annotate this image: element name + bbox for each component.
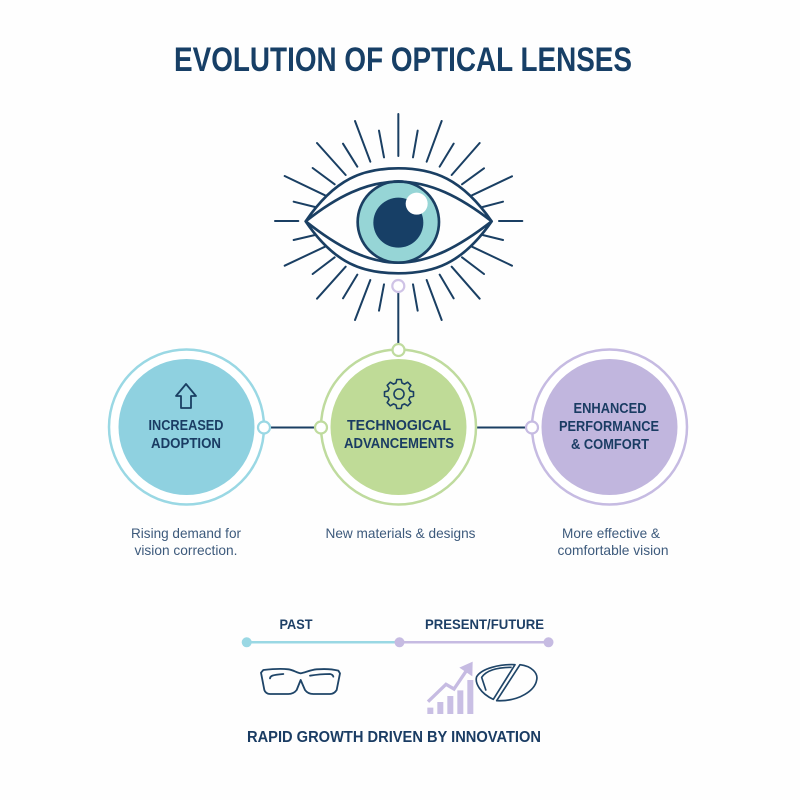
text: new materials: New materials & designs xyxy=(326,525,476,541)
panel: increased adoption xyxy=(109,350,264,504)
text: more effective: More effective & xyxy=(562,525,661,541)
eye rays xyxy=(275,114,522,320)
heading: enhanced performance and comfort: PERFORMANCE xyxy=(559,419,659,435)
connector: eye to center circle xyxy=(397,292,399,345)
panel: technological advancements xyxy=(321,350,476,504)
eye pupil xyxy=(373,198,423,248)
icon: growth chart xyxy=(427,662,473,714)
eye lids xyxy=(306,168,492,273)
connector node: eye xyxy=(392,280,404,292)
eye iris xyxy=(358,181,439,263)
footer caption: RAPID GROWTH DRIVEN BY INNOVATION xyxy=(247,729,541,746)
connector: left to center xyxy=(270,426,315,428)
heading: technological advancements: TECHNOGICAL xyxy=(347,418,451,434)
label: present/future: PRESENT/FUTURE xyxy=(425,616,544,632)
icon: gear xyxy=(384,380,414,408)
heading: technological advancements: ADVANCEMENTS xyxy=(344,436,454,452)
title: EVOLUTION OF OPTICAL LENSES xyxy=(174,41,632,79)
timeline xyxy=(242,637,553,647)
eye highlight xyxy=(406,193,428,215)
label: past: PAST xyxy=(280,616,313,632)
heading: enhanced performance and comfort: ENHANCED xyxy=(574,401,646,417)
node: right circle left xyxy=(526,422,538,434)
heading: increased adoption: INCREASED xyxy=(148,418,224,434)
node: left circle right xyxy=(258,422,270,434)
panel: enhanced performance and comfort xyxy=(532,350,687,504)
text: more effective: comfortable vision xyxy=(558,542,668,558)
heading: enhanced performance and comfort: & COMFORT xyxy=(571,437,649,453)
heading: increased adoption: ADOPTION xyxy=(151,436,221,452)
icon: split lens xyxy=(476,665,537,701)
connector: center to right xyxy=(477,426,526,428)
icon: eye with rays xyxy=(275,114,522,320)
node: center circle left xyxy=(315,422,327,434)
text: rising demand: Rising demand for xyxy=(131,525,241,541)
text: rising demand: vision correction. xyxy=(134,542,238,558)
node: center circle top xyxy=(392,344,404,356)
icon: up arrow xyxy=(176,384,196,408)
icon: glasses xyxy=(261,669,340,694)
